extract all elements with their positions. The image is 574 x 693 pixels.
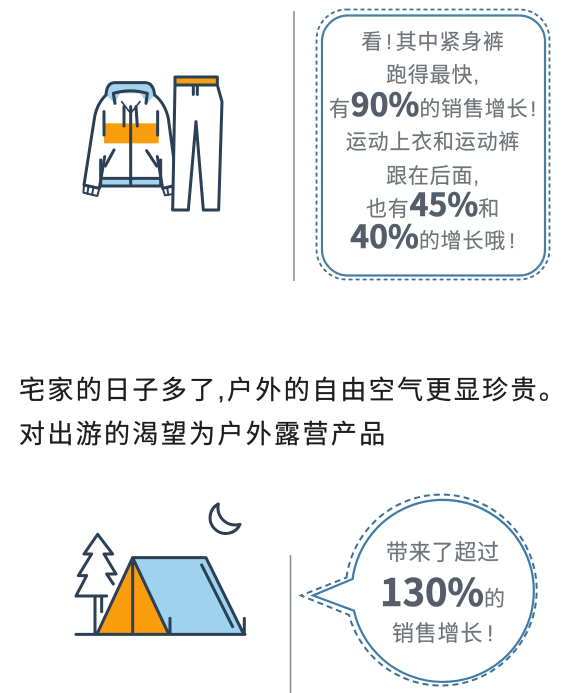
heading: outdoor desire: 宅家的日子多了,户外的自由空气更显珍贵。 (19, 375, 567, 405)
callout: inner bubble (313, 500, 534, 682)
text block: clothing sales growth: 跟在后面, (386, 165, 480, 188)
heading: outdoor desire: 对出游的渴望为户外露营产品 (19, 419, 388, 449)
icon: tent with tree and moon (76, 504, 245, 634)
text block: clothing sales growth: 40%的增长哦! (350, 212, 516, 258)
icon: sweatpants (173, 77, 222, 210)
text block: clothing sales growth: 跑得最快, (386, 64, 480, 87)
text block: camping sales growth: 带来了超过 (386, 540, 500, 565)
heading: outdoor desire (19, 375, 567, 449)
callout: inner border (322, 16, 545, 276)
text block: camping sales growth: 130%的 (380, 562, 506, 617)
panel: clothing sales callout (316, 10, 550, 280)
text block: camping sales growth: 销售增长! (392, 621, 494, 646)
icon: hooded jacket (83, 83, 177, 196)
text block: clothing sales growth (329, 31, 537, 258)
divider: upper vertical line (293, 11, 295, 281)
text block: clothing sales growth: 也有45%和 (366, 180, 500, 226)
text block: camping sales growth (380, 540, 506, 646)
text block: clothing sales growth: 有90%的销售增长! (329, 80, 537, 126)
text block: clothing sales growth: 看!其中紧身裤 (361, 31, 505, 54)
text block: clothing sales growth: 运动上衣和运动裤 (346, 131, 520, 154)
divider: lower vertical line (290, 555, 292, 693)
panel: camping sales speech bubble (301, 495, 537, 686)
callout: outer dashed border (316, 10, 550, 280)
callout: outer dashed bubble (301, 495, 537, 686)
